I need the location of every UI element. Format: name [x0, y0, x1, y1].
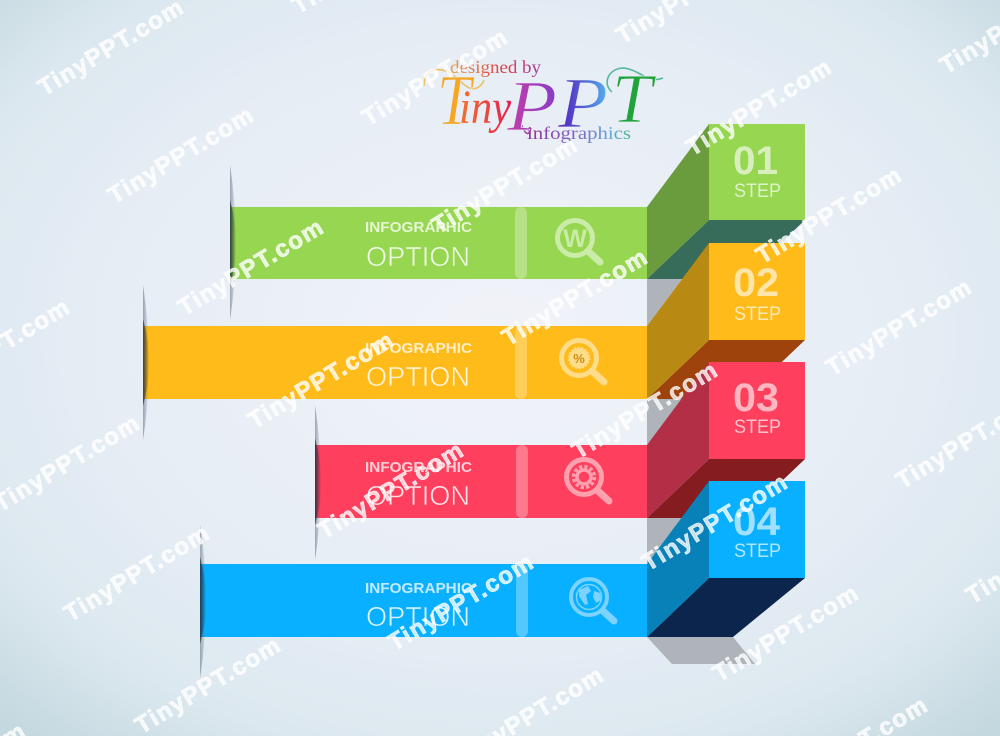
- logo wordmark: T: [437, 60, 475, 140]
- amber bar option: OPTION: [366, 361, 470, 392]
- green bar heading: INFOGRAPHIC: [365, 219, 472, 236]
- green bar: [230, 207, 647, 279]
- amber bar: [143, 326, 647, 399]
- logo: designed by TinyPPT infographics: [424, 57, 663, 146]
- gray shadow under green: [647, 279, 682, 326]
- watermarks: TinyPPT.com: [567, 356, 723, 465]
- watermarks: TinyPPT.com: [637, 468, 793, 577]
- green step label: STEP: [734, 180, 781, 202]
- red bar option: OPTION: [366, 480, 470, 511]
- logo wordmark: iny: [459, 81, 512, 134]
- green step number: 01: [733, 139, 778, 183]
- watermarks: TinyPPT.com: [243, 326, 399, 435]
- amber bar heading: INFOGRAPHIC: [365, 340, 472, 357]
- step 2: amber ribbon: [143, 243, 805, 399]
- icon: magnifier with W: [558, 220, 600, 262]
- amber step face: [709, 243, 805, 340]
- gray shadow under amber: [647, 399, 682, 445]
- watermarks: TinyPPT.com: [821, 273, 977, 382]
- red bar: [315, 445, 647, 518]
- watermarks: TinyPPT.com: [751, 161, 907, 270]
- red step face: [709, 362, 805, 459]
- amber divider: [515, 326, 527, 399]
- red ribbon side: [647, 362, 709, 518]
- red step number: 03: [733, 376, 779, 420]
- blue ribbon side: [647, 481, 709, 637]
- green step face: [709, 124, 805, 220]
- red divider: [516, 445, 528, 518]
- blue divider: [516, 564, 528, 637]
- amber step label: STEP: [734, 303, 781, 325]
- blue step label: STEP: [734, 540, 781, 562]
- watermarks: TinyPPT.com: [357, 23, 513, 132]
- step 3: red ribbon: [315, 362, 805, 518]
- amber ribbon underside: [647, 340, 805, 399]
- green ribbon side: [647, 124, 709, 279]
- green ribbon underside: [647, 220, 805, 279]
- logo wordmark: P: [506, 66, 557, 146]
- red ribbon underside: [647, 459, 805, 518]
- watermarks: TinyPPT.com: [497, 243, 653, 352]
- icon: magnifier with gear: [566, 460, 609, 501]
- gray floor shadow: [647, 637, 755, 664]
- logo tagline bottom: infographics: [527, 123, 631, 143]
- watermarks: TinyPPT.com: [681, 53, 837, 162]
- red step label: STEP: [734, 416, 781, 438]
- blue bar: [200, 564, 647, 637]
- amber ribbon side: [647, 243, 709, 399]
- watermarks: TinyPPT.com: [173, 213, 329, 322]
- logo tagline top: designed by: [450, 57, 541, 77]
- green divider: [515, 207, 527, 279]
- watermarks: TinyPPT.com: [103, 101, 259, 210]
- logo wordmark: P: [557, 63, 608, 143]
- blue step face: [709, 481, 805, 578]
- green bar option: OPTION: [366, 241, 470, 272]
- watermarks: TinyPPT.com: [708, 579, 864, 688]
- logo wordmark: [437, 60, 657, 146]
- icon: magnifier with globe: [571, 579, 614, 621]
- step 1: green ribbon: [230, 124, 805, 279]
- gray shadow under red: [647, 518, 682, 564]
- watermarks: TinyPPT.com: [59, 519, 215, 628]
- blue step number: 04: [733, 500, 781, 544]
- red bar heading: INFOGRAPHIC: [365, 459, 472, 476]
- slit shadows at bar ends: [143, 165, 321, 678]
- logo wordmark: T: [612, 61, 657, 138]
- blue bar heading: INFOGRAPHIC: [365, 580, 472, 597]
- watermarks: TinyPPT.com: [383, 548, 539, 657]
- watermarks: TinyPPT.com: [427, 131, 583, 240]
- icon: magnifier with percent badge: [562, 340, 604, 382]
- blue bar option: OPTION: [366, 601, 470, 632]
- icon: magnifier with W: W: [563, 225, 587, 253]
- watermarks: TinyPPT.com: [313, 436, 469, 545]
- blue ribbon underside: [647, 578, 805, 637]
- step 4: blue ribbon: [200, 481, 805, 637]
- icon: magnifier with percent badge: %: [573, 351, 585, 366]
- amber step number: 02: [733, 261, 779, 305]
